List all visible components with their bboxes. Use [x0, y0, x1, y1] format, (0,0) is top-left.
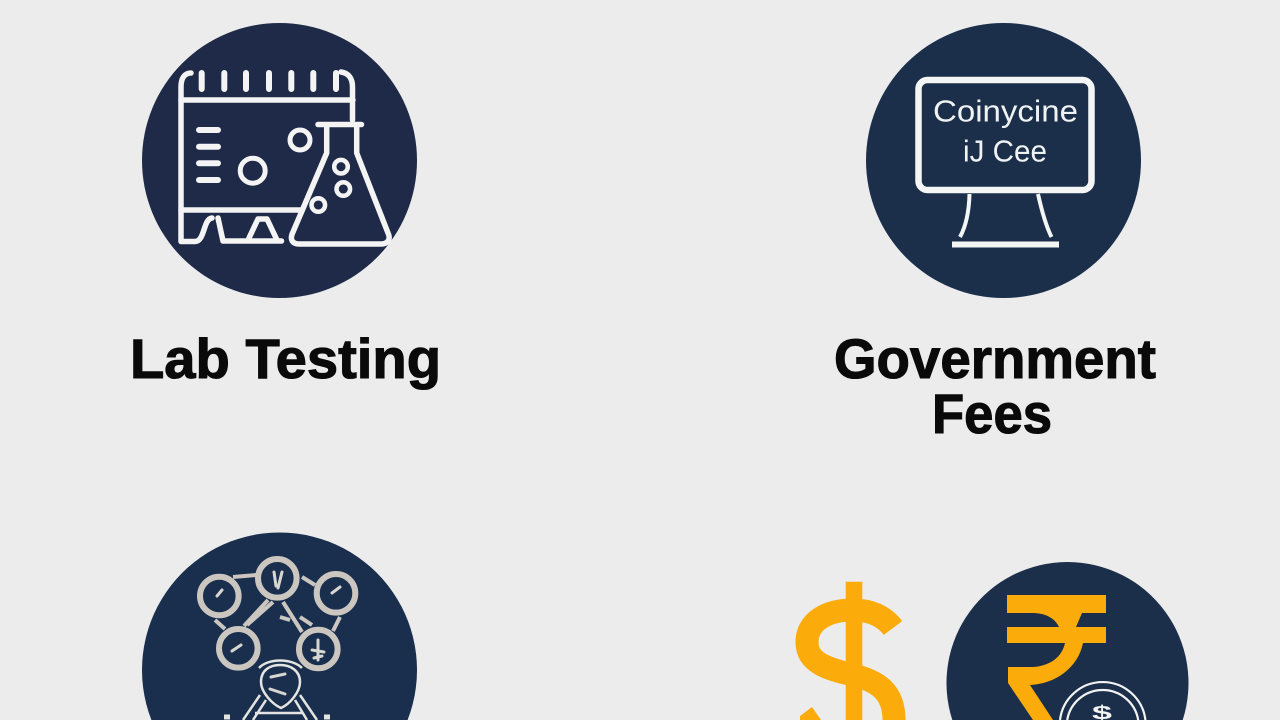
panel: government fees [834, 23, 1156, 445]
label: lab testing: Lab Testing [130, 327, 441, 390]
rupee symbol [1007, 595, 1106, 720]
icon: monitor [866, 23, 1141, 298]
icon: dollar sign [800, 582, 894, 720]
small coin [1060, 682, 1145, 720]
icon: monitor: Coinycine [933, 94, 1078, 128]
icon: network of connected nodes [142, 533, 417, 720]
icon: lab equipment and flask [142, 23, 417, 298]
label: government fees: Fees [932, 382, 1052, 445]
label: government fees: Government [834, 327, 1156, 390]
panel: lab testing [130, 23, 441, 390]
label: government fees [834, 327, 1156, 445]
icon: rupee coin [946, 562, 1188, 720]
icon: monitor: iJ Cee [963, 134, 1047, 168]
